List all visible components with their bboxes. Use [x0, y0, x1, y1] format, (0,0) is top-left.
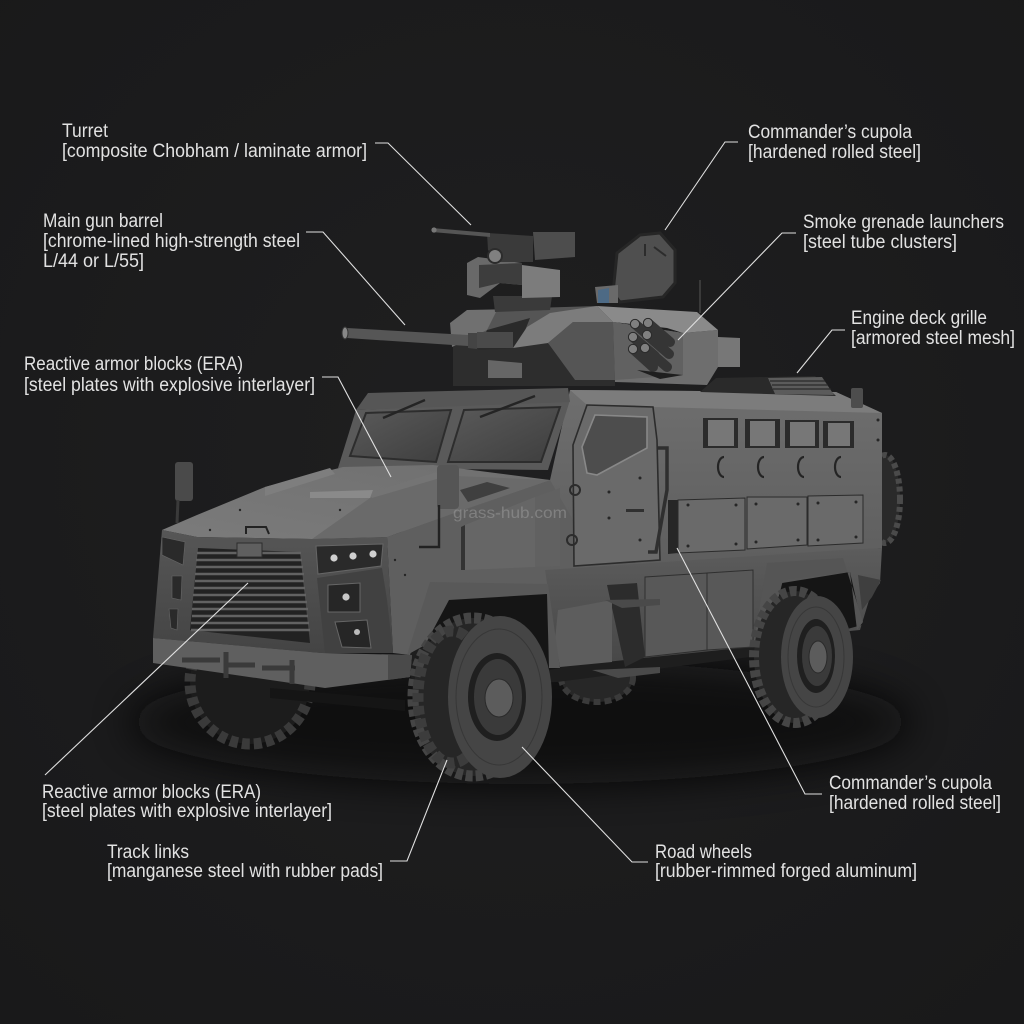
rear wheel arch: [770, 572, 862, 650]
sensor box: [595, 285, 618, 303]
hood: [162, 465, 550, 539]
front step panel: [555, 600, 612, 667]
label: turret: [62, 121, 471, 225]
label: commander's cupola lower: Commander’s cupola: [829, 773, 992, 794]
label: reactive armor upper: Reactive armor blocks (ERA): [24, 354, 243, 375]
label: commander's cupola upper: [665, 122, 921, 230]
side armor boxes: [668, 495, 863, 554]
label: road wheels: [522, 747, 917, 882]
tow hardware: [182, 652, 295, 684]
remote weapon station: [431, 227, 575, 312]
firing ports: [718, 457, 841, 477]
hood vent: [460, 482, 510, 502]
label: main gun barrel: [43, 211, 405, 325]
label: main gun barrel: L/44 or L/55]: [43, 251, 144, 272]
label: turret: [composite Chobham / laminate armor]: [62, 141, 367, 162]
lamp box lower: [335, 620, 371, 648]
label: road wheels: Road wheels: [655, 842, 752, 863]
label: track links: [manganese steel with rubber pads]: [107, 861, 383, 882]
label: reactive armor lower: [steel plates with explosive interlayer]: [42, 801, 332, 822]
main gun barrel: [342, 327, 513, 349]
engine deck grille: [700, 376, 836, 396]
wipers: [383, 396, 535, 418]
label: commander's cupola lower: [677, 548, 1001, 814]
rear fender: [753, 558, 863, 646]
front face: [153, 530, 393, 653]
label: commander's cupola upper: Commander’s cupola: [748, 122, 912, 143]
grille: [190, 548, 310, 643]
label: engine deck grille: Engine deck grille: [851, 308, 987, 329]
cowl hump: [265, 468, 335, 496]
launcher shadow: [637, 370, 683, 379]
grille emblem: [237, 543, 262, 557]
label: engine deck grille: [797, 308, 1015, 373]
label: smoke grenade launchers: [steel tube clusters]: [803, 232, 957, 253]
hood raised panel: [310, 490, 373, 498]
left lamps: [162, 537, 185, 630]
label: turret: Turret: [62, 121, 109, 142]
front fender: [407, 582, 560, 668]
front armor box: [461, 488, 560, 570]
label: reactive armor lower: Reactive armor blocks (ERA): [42, 782, 261, 803]
handrail: [648, 448, 667, 552]
label: main gun barrel: Main gun barrel: [43, 211, 163, 232]
right face dark panel: [317, 568, 393, 653]
smoke grenade launchers: [628, 318, 670, 367]
label: smoke grenade launchers: Smoke grenade launchers: [803, 212, 1004, 233]
label: smoke grenade launchers: [678, 212, 1004, 340]
far front wheel: [190, 620, 310, 744]
front wheel: [413, 616, 552, 778]
upper hull side: [390, 390, 882, 590]
antenna: [699, 280, 701, 313]
label: reactive armor upper: [24, 354, 391, 477]
windshield frame: [338, 400, 570, 470]
spare wheel: [870, 455, 900, 543]
lamp box upper: [328, 583, 360, 612]
label: track links: [107, 760, 447, 882]
roof band: [570, 390, 882, 413]
commander's cupola hatch: [613, 233, 675, 302]
exhaust: [851, 388, 863, 408]
ground shadow: [130, 660, 910, 784]
label: road wheels: [rubber-rimmed forged aluminum]: [655, 861, 917, 882]
side hatches: [703, 418, 854, 448]
underbody: [400, 560, 880, 690]
door: [573, 405, 660, 566]
storage door 2: [707, 570, 753, 650]
label: main gun barrel: [chrome-lined high-strength steel: [43, 231, 300, 252]
lower hull side: [545, 548, 882, 667]
rear lower dark corner: [858, 575, 881, 610]
front wheel arch: [430, 590, 560, 690]
front axle: [270, 688, 405, 711]
step recess: [607, 583, 645, 667]
steps: [592, 599, 660, 678]
label: reactive armor upper: [steel plates with explosive interlayer]: [24, 375, 315, 396]
hood handle: [246, 527, 269, 534]
label: commander's cupola lower: [hardened rolled steel]: [829, 793, 1001, 814]
front hull side: [387, 480, 573, 655]
left side mirror: [175, 462, 193, 523]
far rear wheel: [561, 654, 633, 702]
rivets: [209, 418, 880, 576]
armored vehicle: [153, 227, 900, 778]
rear wheel: [754, 591, 853, 723]
label: reactive armor lower: [42, 583, 332, 822]
label: commander's cupola upper: [hardened rolled steel]: [748, 142, 921, 163]
bumper: [153, 638, 412, 688]
turret: [450, 306, 740, 386]
cab roof: [356, 388, 570, 410]
hood ridge: [372, 472, 440, 498]
label: track links: Track links: [107, 842, 189, 863]
headlight cluster: [316, 544, 383, 574]
right side mirror: [419, 465, 459, 547]
left windshield: [350, 410, 451, 462]
hood lower crease: [312, 475, 550, 539]
watermark: grass-hub.com: [453, 505, 567, 522]
right windshield: [448, 407, 560, 462]
storage door 1: [645, 573, 707, 657]
